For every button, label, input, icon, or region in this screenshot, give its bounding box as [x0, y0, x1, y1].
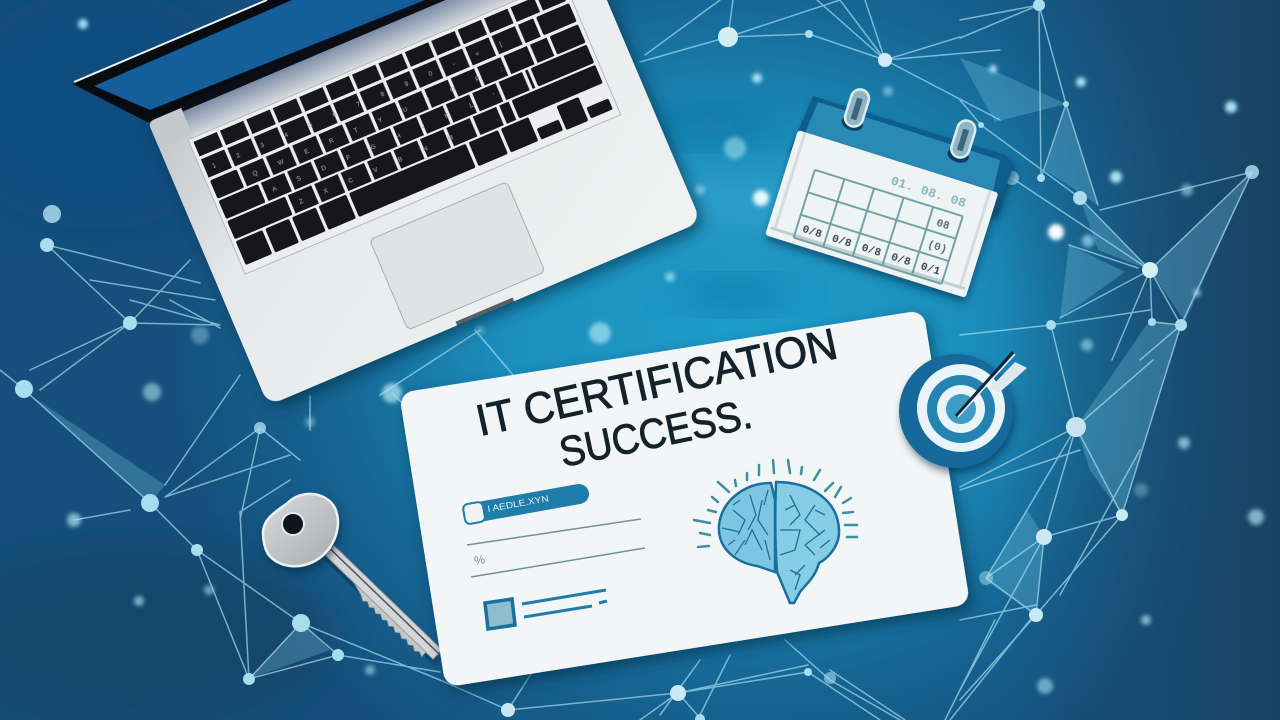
calendar dates: 01. 08. 08 — [889, 174, 968, 211]
keyboard: 1 2 3 4 5 6 7 8 9 0 - = [ — [211, 41, 503, 170]
trackpad — [370, 182, 545, 330]
arrow — [956, 352, 1027, 417]
form: icon and text lines — [485, 590, 607, 629]
icon: brain — [694, 460, 857, 603]
calendar dates: 08 — [935, 218, 951, 233]
key blade — [320, 546, 442, 664]
form: input lines: % — [473, 552, 486, 568]
calendar back board — [790, 96, 1014, 215]
title: IT CERTIFICATION — [472, 320, 842, 446]
key hole — [282, 513, 304, 535]
brain rays — [694, 460, 857, 547]
calendar dates: (0) — [926, 239, 948, 257]
key head — [263, 494, 338, 566]
calendar dates: 0/8 — [830, 233, 853, 251]
calendar grid — [794, 170, 963, 284]
laptop base — [146, 0, 707, 406]
laptop screen — [73, 0, 480, 122]
keyboard: Q W E R T Y U I O P ; — [252, 66, 504, 178]
calendar dates: 0/8 — [860, 243, 883, 260]
calendar page — [765, 130, 998, 298]
card — [399, 310, 970, 687]
brain folds — [722, 490, 830, 590]
key — [263, 494, 442, 664]
brain hemispheres — [719, 483, 775, 572]
form: label pill — [462, 493, 579, 525]
calendar clip left — [840, 87, 873, 133]
form: label pill: I AEDLE.XYN — [487, 493, 549, 514]
calendar — [765, 87, 1014, 298]
calendar clip right — [946, 118, 979, 165]
target rings — [899, 354, 1013, 468]
card panel — [399, 310, 970, 687]
calendar dates: 0/8 — [801, 224, 823, 242]
calendar dates: 0/8 — [889, 252, 912, 269]
icon: target with arrow — [899, 352, 1027, 468]
laptop — [73, 0, 707, 406]
title: SUCCESS. — [555, 390, 756, 476]
keyboard: A S D F G H J K L ' — [271, 93, 496, 193]
keyboard — [188, 0, 621, 274]
form: input lines — [467, 519, 645, 577]
keyboard: Z X C V B N M , . — [298, 115, 499, 206]
calendar dates — [801, 153, 968, 280]
calendar dates: 0/1 — [919, 261, 942, 279]
